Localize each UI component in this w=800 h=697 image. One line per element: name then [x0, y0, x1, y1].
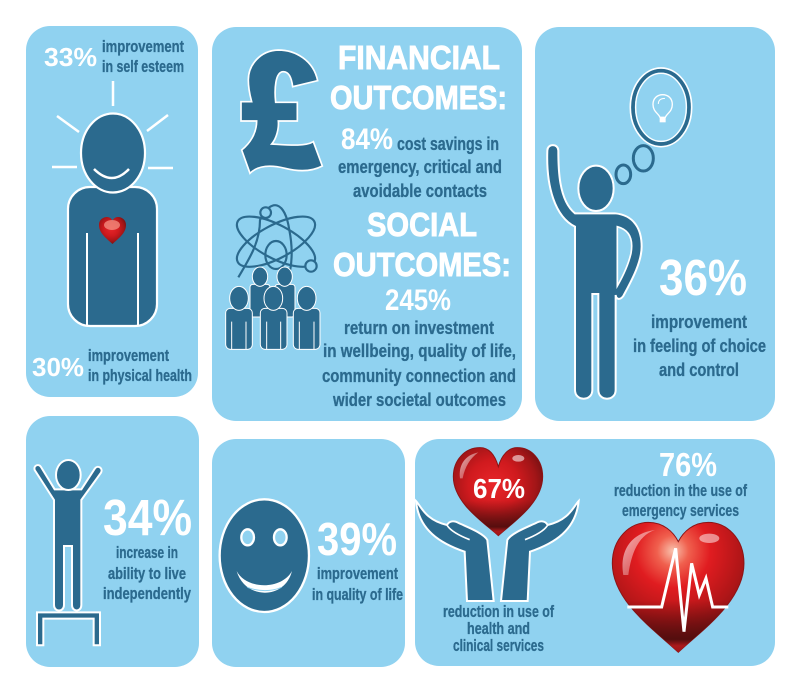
text: reduction in the use of emergency services: emergency services [622, 501, 739, 520]
heading: social outcomes [333, 206, 511, 283]
text: increase in ability to live independently: independently [103, 584, 191, 603]
icon: smiling person with heart [52, 81, 173, 326]
stat: 34%: 34% [103, 489, 192, 546]
icon: person with thought bubble and light bulb [547, 68, 692, 399]
stat: 33%: 33% [44, 42, 97, 72]
text: return on investment: in wellbeing, quality of life, [323, 341, 516, 361]
text: improvement in feeling of choice and control: improvement [651, 312, 747, 332]
text: improvement in self esteem: in self esteem [102, 57, 184, 76]
panel: health and emergency services [415, 439, 775, 666]
text: cost savings: cost savings in [397, 134, 499, 154]
icon: atom and group of people [226, 205, 322, 349]
text: return on investment [322, 318, 516, 410]
heading: social outcomes: OUTCOMES: [333, 246, 511, 283]
text: increase in ability to live independently [103, 543, 191, 603]
text: return on investment: wider societal outcomes [332, 390, 506, 410]
text: improvement in physical health: in physical health [88, 366, 192, 385]
text: reduction in the use of emergency services: reduction in the use of [614, 481, 747, 500]
text: reduction in use of health and clinical services: reduction in use of [443, 602, 554, 621]
text: improvement in feeling of choice and control: and control [659, 360, 739, 380]
text: reduction in use of health and clinical services: clinical services [453, 636, 544, 655]
heading: financial outcomes [330, 39, 507, 116]
icon: heart held by hands [416, 448, 579, 601]
text: improvement in self esteem [102, 37, 184, 76]
text: improvement in quality of life: improvement [317, 564, 398, 583]
panel: quality of life [212, 439, 405, 667]
text: improvement in feeling of choice and control: in feeling of choice [633, 336, 766, 356]
stat: 76%: 76% [659, 446, 717, 483]
heading: social outcomes: SOCIAL [367, 206, 477, 243]
text: cost savings: emergency, critical and [338, 157, 502, 177]
panel: living independently [26, 416, 199, 667]
text: improvement in physical health [88, 346, 192, 385]
icon: smiley face [220, 499, 309, 612]
icon: pound sign [241, 50, 322, 173]
text: improvement in physical health: improvement [88, 346, 169, 365]
text: reduction in the use of emergency services [614, 481, 747, 520]
heading: financial outcomes: OUTCOMES: [330, 79, 507, 116]
icon: person with raised arms on a step [34, 460, 102, 645]
panel: financial and social outcomes [212, 27, 522, 421]
stat: 30%: 30% [32, 352, 84, 382]
text: return on investment: community connection and [322, 366, 516, 386]
stat: 84%: 84% [341, 123, 393, 156]
text: return on investment: return on investment [344, 318, 494, 338]
panel: self esteem and physical health [26, 26, 198, 397]
text: cost savings [338, 134, 502, 201]
panel: choice and control [535, 27, 775, 421]
text: improvement in self esteem: improvement [102, 37, 184, 56]
text: improvement in quality of life [312, 564, 403, 604]
text: increase in ability to live independently: increase in [116, 543, 178, 562]
icon: heart with ECG line [612, 522, 744, 652]
text: reduction in use of health and clinical services [443, 602, 554, 655]
stat: 67%: 67% [473, 473, 525, 504]
text: cost savings: avoidable contacts [353, 181, 487, 201]
text: reduction in use of health and clinical services: health and [467, 619, 530, 638]
stat: 245%: 245% [385, 284, 451, 317]
stat: 36%: 36% [659, 249, 747, 306]
text: increase in ability to live independently: ability to live [108, 564, 186, 583]
stat: 39%: 39% [317, 513, 397, 565]
text: improvement in feeling of choice and control [633, 312, 766, 380]
heading: financial outcomes: FINANCIAL [338, 39, 500, 76]
text: improvement in quality of life: in quality of life [312, 585, 403, 604]
